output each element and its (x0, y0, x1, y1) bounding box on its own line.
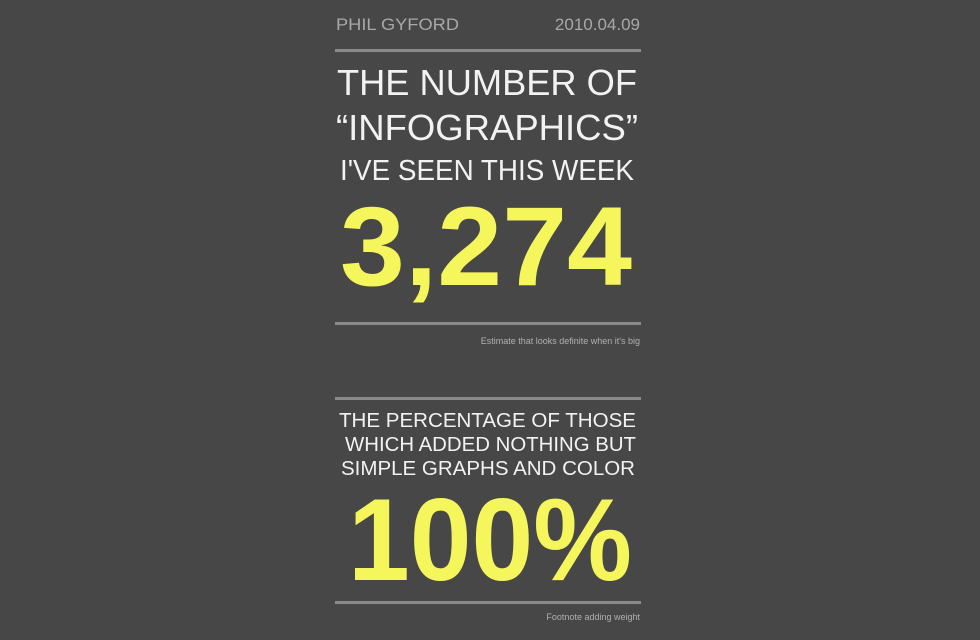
heading: percentage (339, 410, 636, 480)
header: author and date (336, 15, 640, 34)
heading: percentage: WHICH ADDED NOTHING BUT (345, 434, 636, 456)
heading: number of infographics: THE NUMBER OF (337, 62, 637, 103)
header: author and date: PHIL GYFORD (336, 15, 459, 34)
big number: 3,274: 3,274 (340, 184, 632, 309)
heading: percentage: SIMPLE GRAPHS AND COLOR (341, 458, 635, 480)
big number: 100%: 100% (348, 474, 632, 605)
heading: number of infographics (336, 62, 638, 187)
heading: percentage: THE PERCENTAGE OF THOSE (339, 410, 636, 432)
heading: number of infographics: “INFOGRAPHICS” (336, 107, 638, 148)
header: author and date: 2010.04.09 (555, 15, 640, 34)
footnote: Footnote adding weight (546, 612, 640, 622)
caption: estimate: Estimate that looks definite when it's big (481, 336, 640, 346)
heading: number of infographics: I'VE SEEN THIS WEEK (340, 155, 635, 187)
